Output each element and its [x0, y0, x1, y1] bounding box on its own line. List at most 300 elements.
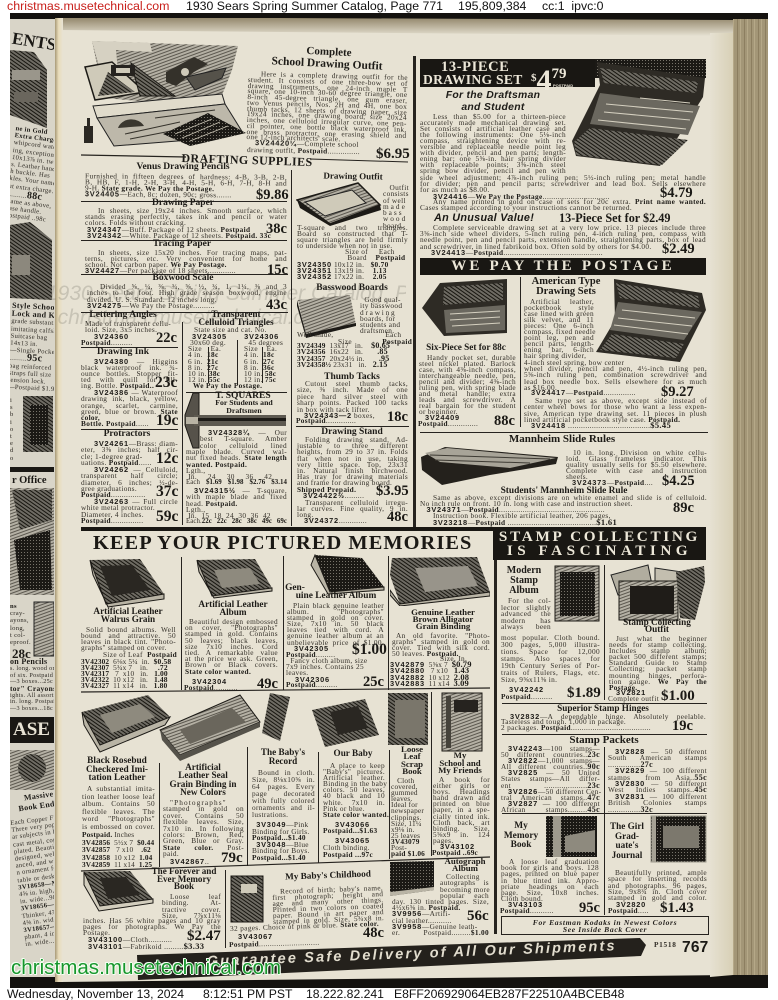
page code: P1518: [654, 940, 677, 949]
text block: 13-piece budget set: Complete serviceable drawing set at a very low price. 13 pieces include three: [433, 223, 706, 232]
text block: outfit description: to underside when not in use.: [297, 241, 392, 250]
order lines: paper: [87, 225, 271, 240]
text block: pencils: [10, 657, 54, 712]
order line: 3V23218: 3V23218—Postpaid .........................................$1.61: [433, 517, 617, 527]
text block: drawing ink: ing. Bottle. Postpaid..: [81, 381, 154, 390]
divider rule between album rows: [80, 685, 492, 695]
order line: Postpaid............................: [229, 938, 320, 949]
table rows: walrus: [81, 659, 171, 689]
panel: the girl graduate's journal: [607, 815, 708, 916]
heading: Loose Leaf Scrap Book: [401, 746, 423, 775]
text block: triangles note: State size and cat. No.: [194, 325, 267, 334]
text block: brass protractor: eter, 3⅜ inches; half cir-: [81, 445, 178, 454]
text block: forever narrow: Size, 7⅞x11⅛: [162, 911, 221, 920]
text block: packets left: 3V42243—100 stamps—: [508, 744, 600, 753]
text block: autograph wide: day. 130 tinted pages. Size,: [392, 897, 489, 906]
text block: school bag copy: bag reinforced: [10, 362, 52, 371]
heading: for students and draftsmen: [215, 399, 273, 414]
heading: Autograph Album: Album: [452, 863, 478, 873]
text block: lettering angles: loid. Size, 3x5 inches.: [85, 325, 157, 334]
text block: artificial album: on cover, "Photographs": [185, 623, 278, 632]
text block: genuine album: Plain black genuine leather: [293, 601, 384, 610]
text block: outfit narrow column: bass: [383, 208, 404, 217]
text block: our baby: A place to keep: [330, 761, 385, 770]
text block: celluloid protractor: [81, 465, 178, 499]
heading: Transparent Celluloid Triangles: Celluloid Triangles: [198, 318, 274, 328]
heading: My School and My Friends: My: [454, 750, 466, 760]
text block: rosebud: album. Contains 50: [82, 799, 155, 808]
text block: american type narrow: [524, 299, 594, 359]
text block: walrus: bound and attractive. 50: [81, 631, 176, 640]
text block: american type narrow: case lined with green: [524, 309, 594, 318]
banner: guarantee safe delivery: [130, 934, 650, 982]
table: outfit sizes: [343, 249, 405, 261]
heading: My School and My Friends: My Friends: [438, 765, 482, 775]
text block: packets left: 3V2822—1,000 stamps—: [508, 756, 600, 765]
table: 30x60 triangles: 10 in. 38c: [188, 369, 220, 378]
text block: packets left: [501, 746, 600, 813]
order lines: baby's record: 3V3049—Pink: [256, 820, 308, 829]
text block: scrap book: newspaper: [391, 806, 424, 815]
text block: journal: Beautifully printed, ample: [615, 868, 707, 877]
heading: Artificial Leather Album: Album: [219, 607, 247, 617]
text block: basswood: drawing: [360, 308, 397, 317]
text block: drawing paper: In sheets, size 19x24 inches. Smooth surface, which: [98, 206, 287, 215]
text block: crayons: ayons,: [10, 617, 29, 624]
heading: Modern Stamp Album: Modern: [507, 565, 541, 576]
text block: seal grain: cover. Contains 50: [163, 811, 244, 820]
text block: brass protractor: [81, 439, 178, 467]
text block: forever wide: [83, 918, 221, 936]
picture: alligator album: [390, 556, 490, 606]
text block: 3V24328: color celluloid lined: [200, 441, 287, 450]
text block: american type wide: [524, 360, 707, 391]
heading: Students' Mannheim Slide Rule: Students' Mannheim Slide Rule: [501, 486, 627, 496]
order number: 3V42305: 3V42305: [294, 644, 329, 653]
picture: office supplies: [10, 488, 54, 595]
text block: packets right: stamps from Asia..55c: [608, 773, 707, 782]
order line: Postpaid ..69c: [432, 848, 478, 857]
text block: stamp album wide: 300 pages, 5,000 illustra-: [501, 640, 600, 649]
text block: baby's record: with fully colored: [252, 796, 315, 805]
text block: baby's record: lustrations.: [252, 810, 288, 819]
picture: open drawing set case: [570, 60, 707, 168]
text block: tracing paper: school. Not carbon paper. We Pay Postage.: [85, 260, 227, 269]
panel: our baby: [320, 748, 387, 860]
table rows: alligator: 3V42879 5⅝x 7 $0.79: [390, 659, 472, 669]
text block: stamp album wide: 19th Century Series of Por-: [501, 661, 600, 670]
text block: thumb tacks: in box with tack lifter.: [297, 405, 370, 414]
text block: set description: with replaceable points; 3⅝-inch steel: [420, 160, 566, 169]
text block: metal protractor: Diameter, 4 inches.: [81, 510, 144, 519]
text block: tracing paper: In sheets, size 15x20 inches. For tracing maps, pat-: [98, 248, 287, 257]
banner: guarantee safe delivery: Guarantee Safe Delivery of All Our Shipments: [207, 938, 615, 970]
text block: stamp outfit: Just what the beginner: [616, 634, 707, 643]
banner: stamp collecting is fascinating: [493, 528, 706, 560]
picture: six-piece case: [420, 277, 510, 337]
text block: baby's record: 64 pages. Every: [252, 782, 315, 791]
text block: six-piece description: ruling pen, with spring blade: [419, 383, 516, 392]
text block: set description: Set consists of artificial leather case and: [420, 124, 566, 133]
heading: Autograph Album: Autograph: [444, 856, 486, 866]
text block: six-piece description: case, with 4⅜-inch compass,: [419, 365, 516, 374]
order line: 3V43101: 3V43101—Fabrikoid .........$3.33: [88, 941, 204, 951]
text block: rosebud: flexible leaves. The: [82, 807, 155, 816]
order number: 3V2821: 3V2821: [616, 688, 646, 697]
text block: american type narrow: compass, fixed needle: [524, 327, 596, 336]
text block: forever narrow: tractive cover.: [162, 905, 221, 914]
text block: drawing ink: 3V24380 — Higgins: [94, 357, 178, 366]
text block: our baby: white. 7x10 in.: [323, 798, 385, 807]
order number: 3V43065: 3V43065: [335, 836, 370, 845]
text block: tracing paper: 3V24427—Per package of 18 sheets.............: [85, 266, 236, 275]
text block: forever narrow: [162, 894, 221, 919]
order line: tacks postpaid: Postpaid..............: [296, 416, 356, 425]
text block: irregular curves: [297, 500, 408, 519]
panel: my school and my friends: [432, 752, 490, 857]
text block: irregular curves: long.: [297, 510, 314, 519]
heading: Drawing Ink: Drawing Ink: [97, 347, 149, 357]
order number: 3V2820: 3V2820: [616, 900, 646, 909]
text block: packets left: 3V2825 — 50 United: [508, 768, 600, 777]
heading: The Girl Graduate's Journal: uate's: [616, 840, 638, 850]
heading: Artificial Leather Seal Grain Binding: New Colors: [180, 787, 226, 797]
text block: walrus: graphs" stamped on cover.: [81, 643, 167, 652]
text block: six-piece description: [419, 355, 516, 415]
text block: 3V24315: In. 15 18 24 30 36 42: [188, 511, 271, 520]
text block: packets right: 3V2831 — 100 different: [615, 792, 707, 801]
text block: 3V24315: Lgth.,: [186, 505, 205, 514]
text block: drawing stand: in. Natural finish birchwood.: [297, 466, 408, 475]
text block: my friends: [433, 777, 490, 844]
panel: my baby's childhood: [228, 866, 386, 950]
text block: autograph wide: 3V9956—Artifi-: [392, 909, 451, 918]
text block: stamp outfit: Postage.: [609, 683, 637, 692]
text block: lettering angles: Made of transparent cellu-: [85, 319, 171, 328]
text block: autograph narrow: becoming more: [440, 885, 490, 894]
text block: thumb tacks: piece hard silver steel with: [297, 392, 408, 401]
table rows: basswood: 3V24349 13x17 in. $0.65: [297, 341, 390, 350]
heading: Tracing Paper: Tracing Paper: [153, 239, 211, 249]
table: outfit sizes: Size of Each: [345, 247, 395, 256]
picture: stamp album: [554, 565, 601, 624]
text block: set description: Less than $5.00 for a thirteen-piece: [433, 112, 566, 121]
text block: my friends: paper, in a spe-: [433, 805, 490, 814]
text block: baby's record: Bound in cloth.: [258, 768, 315, 777]
text block: brass protractor: 3V24261—Brass: diam-: [94, 439, 178, 448]
panel: drawing outfit small: [295, 170, 410, 282]
price: 19c: 19c: [156, 412, 178, 429]
text block: american type narrow: silk velvet, and 11: [524, 315, 594, 324]
text block: our baby: Pink or blue.: [323, 804, 365, 813]
heading: Artificial Leather Walrus Grain: Walrus Grain: [101, 614, 155, 624]
text block: metal protractor: 3V24263 — Full circle: [94, 497, 178, 506]
table rows: outfit order numbers: 3V24350 10x12 in. $0.70: [297, 260, 389, 269]
banner text: postpaid: POSTPAID: [553, 83, 573, 88]
text block: pencils: on Pencils: [10, 657, 47, 666]
text: tasteless: [501, 719, 651, 731]
text block: basswood: Good qual-: [364, 295, 401, 304]
banner price: $4.79: $479: [531, 64, 566, 97]
text block: thumb tacks: [297, 381, 408, 413]
panel: american type drawing sets: [523, 277, 709, 430]
text block: basswood: students and: [360, 320, 400, 329]
text block: baby's childhood: [272, 885, 384, 926]
panel: black rosebud album: [80, 757, 158, 868]
text block: alligator: graphs" stamped in gold on: [392, 637, 490, 646]
text block: american type narrow: pocketbook style: [524, 303, 594, 312]
panel: venus pencils, drawing and tracing paper, boxwood scale: [81, 162, 289, 313]
text block: genuine album: unbelievable price of $1.00.: [287, 638, 384, 647]
text block: set description: the following instruments: One 5⅛-inch: [420, 130, 566, 139]
text block: six-piece description: interchangeable needle, pen,: [419, 371, 516, 380]
price: 38c: 38c: [266, 221, 287, 237]
text block: our baby: State color wanted.: [323, 810, 389, 819]
table: outfit sizes: Board Postpaid: [347, 253, 405, 262]
text block: packets right: 3V2830 — 50 different: [615, 779, 707, 788]
text block: journal: and photographs. 96 pages,: [608, 881, 707, 890]
banner: stamp collecting is fascinating: IS FASCINATING: [507, 542, 692, 559]
text block: gold name: Cases stamped according to your instructions cannot be returned.: [420, 203, 632, 212]
text block: basswood: [360, 297, 402, 335]
heading: Genuine Leather Brown Alligator Grain Binding: Brown Alligator: [413, 614, 473, 624]
text block: t square details: maple blade. Curved wal-: [186, 447, 287, 456]
text block: outfit description: two Venus pencils, Nos. 2H and 4H, one box: [247, 98, 407, 111]
order line: Complete outfit: [608, 694, 659, 703]
text block: drawing ink: ounce bottles. Stopper fit-: [81, 369, 178, 378]
price: 28c: 28c: [12, 646, 31, 661]
text block: baby's childhood: age and many other things.: [272, 895, 384, 908]
text block: american type wide: as $16.00.: [524, 383, 557, 392]
text block: slide rule: quality usually sells for $5.50 elsewhere.: [566, 460, 707, 469]
text block: metal protractor: Postpaid...............: [81, 516, 143, 525]
text block: autograph wide: er. Postpaid.........$1.00: [392, 928, 489, 937]
table rows: basswood: 3V24357 20x24½ in. .95: [297, 354, 389, 363]
text block: massive book ends: [18, 789, 54, 813]
order line: 3V24420: 3V24420¼—Complete school: [255, 138, 359, 149]
text block: memory book: pages, printed on blue paper: [501, 869, 599, 878]
price: 89c: 89c: [673, 500, 694, 516]
text block: set description: with divider, pencil and pen parts; length-: [420, 148, 566, 157]
table rows: rosebud: [82, 831, 154, 869]
text block: fancy cloth album: [286, 652, 367, 676]
icon: portfolio case: [23, 396, 53, 452]
text block: stamp outfit: Collecting; packet stamp: [609, 664, 707, 673]
heading: Stamp Collecting Outfit: Outfit: [645, 624, 669, 634]
order line: 3V24422: 3V24422½.........: [303, 491, 364, 500]
text block: boxwood scale: [87, 282, 287, 310]
text block: my friends: A book for: [439, 775, 490, 784]
price: $6.95: $6.95: [376, 146, 410, 162]
text block: pencils: —3 boxes...25c: [10, 678, 53, 685]
text block: six-piece description: pencil and divider; 4⅜-inch: [419, 377, 516, 386]
heading: The Girl Graduate's Journal: Journal: [612, 850, 642, 860]
text block: stamp outfit: Includes stamp album;: [609, 646, 707, 655]
order number: 3V43067: 3V43067: [238, 932, 273, 941]
price: 48c: 48c: [363, 925, 384, 941]
text block: students rule: No inch rule on front. 10 in. long with case and instruction sheet.: [420, 499, 633, 508]
text block: autograph narrow: popular each: [440, 891, 489, 900]
text block: genuine album: Size, 7x10 in. 50 black: [287, 619, 384, 628]
panel: drawing stand: [295, 427, 410, 525]
heading: Complete: Complete: [306, 45, 352, 59]
text block: autograph narrow: Collecting: [446, 872, 480, 881]
panel: complete school drawing outfit: [84, 41, 410, 169]
text block: 3V24328: 3V24328¼ — Our: [208, 428, 287, 437]
text block: bag copy: h buckle. Has: [10, 168, 50, 180]
table: 30x60 triangles: 30x60 deg.: [190, 338, 226, 347]
text block: artificial album: [185, 619, 278, 675]
text block: outfit description: one brass protractor, one erasing shield and: [246, 126, 407, 139]
panel: my memory book: [499, 815, 602, 916]
order line: Postpaid...$1.63: [323, 826, 378, 835]
text block: packets left: States stamps—All differ-: [501, 774, 600, 783]
heading: The Girl Graduate's Journal: The Girl: [610, 821, 644, 831]
text block: outfit description: square, one 10-inch 30-60 degree triangle, one: [247, 86, 408, 99]
text block: packets right: British Colonies stamps: [608, 798, 707, 807]
text block: irregular curves: lar curves. Fine quality, 9 in.: [297, 504, 408, 513]
panel: loose leaf scrap book: [390, 746, 430, 858]
heading: American Type Drawing Sets: Drawing Sets: [536, 286, 596, 297]
heading: Office: r Office: [12, 475, 46, 486]
text block: stamp outfit: packet 500 different stamps;: [609, 652, 707, 661]
table: 45 degree triangles: 12 in. 75c: [244, 375, 276, 384]
text block: my friends: printed on blue: [433, 799, 490, 808]
text: well made: Well made, Each: [297, 330, 401, 339]
text block: artificial album: State color wanted.: [185, 667, 251, 676]
text: size head: Size, In.: [440, 654, 467, 663]
text block: pencils: 9-H. State grade. We Pay the Postage.: [85, 183, 214, 193]
table: 45 degree triangles: 6 in. 27c: [244, 357, 275, 366]
heading: Modern Stamp Album: [507, 566, 541, 596]
divider rule above bottom row: [80, 855, 492, 873]
picture: drawing outfit board: [296, 182, 382, 226]
text block: baby's childhood: first photograph; height and: [272, 889, 383, 902]
text block: packets left: tral American stamps..47c: [501, 793, 600, 802]
text block: autograph wide: cial leather...........: [392, 916, 452, 925]
picture: walrus album: [88, 558, 166, 608]
text block: packets right: South American stamps: [608, 753, 707, 762]
text block: tracing paper: terns, pictures, etc. Very convenient for home and: [85, 254, 287, 263]
text block: outfit narrow column: [383, 185, 409, 229]
text block: baby's childhood: Record of birth; baby's name,: [280, 883, 383, 896]
text block: six-piece description: steel nickel plated. Barlock: [419, 359, 516, 368]
heading: The Girl Graduate's Journal: Grad-: [615, 831, 639, 841]
heading: Stamp Packets: Stamp Packets: [569, 734, 639, 746]
text block: school bag copy: 14x13 in.: [10, 340, 38, 348]
text block: celluloid protractor: 3V24262 — Celluloid,: [94, 465, 178, 474]
text block: our baby: colors. 50 leaves,: [323, 785, 385, 794]
text block: fancy cloth album: 7x9 inches. Contains 25: [286, 662, 364, 671]
heading: 13-Piece Set for $2.49: 13-Piece Set for $2.49: [559, 211, 670, 225]
text block: school bag copy: .........95c: [10, 353, 43, 365]
heading: Drawing Outfit: Drawing Outfit: [323, 170, 383, 182]
panel: left facing page: [10, 29, 54, 948]
text block: drawing paper: colors. Folds without cracking.: [85, 218, 186, 227]
text block: boxwood scale: Divided ⅝, ¼, ⅜, ¾, ⅝, ½, ¾, 1, 1¼, ⅜ and 3: [100, 282, 287, 291]
picture: autograph album: [388, 860, 438, 898]
price: 43c: 43c: [266, 297, 287, 313]
text block: students rule: Same as above, except divisions are on white enamel and slide is of celluloid.: [433, 493, 707, 502]
order lines: baby's record: Postpaid...$1.40: [252, 833, 306, 842]
order number: 3V43066: 3V43066: [335, 820, 370, 829]
table: 45 degree triangles: Size Ea.: [244, 344, 277, 353]
order line: 3V24418: 3V24418 ......................................$5.45: [531, 420, 671, 430]
price: 18c: 18c: [387, 409, 408, 425]
text block: stamp outfit: needs for stamp collecting.: [609, 640, 707, 649]
heading: My Memory Book: Book: [511, 840, 531, 850]
text block: scrap book: 25 leaves: [391, 831, 420, 840]
text block: t square details: [186, 449, 287, 487]
text block: outfit description: 8-inch 45-degree triangle, one gum eraser,: [247, 92, 407, 105]
text block: fancy cloth album: Fancy cloth album, size: [290, 656, 367, 665]
text block: celluloid protractor: diameter, 6 inches; ½-de-: [81, 478, 178, 487]
heading: Our Baby: Our Baby: [334, 748, 372, 758]
heading: Artificial Leather Album: [198, 600, 268, 616]
table: 45 degree triangles: [244, 340, 283, 383]
text block: genuine album: leaves tied with cord. A: [287, 625, 384, 634]
text block: metal protractor: [81, 497, 178, 525]
text block: portfolio: i: [10, 397, 12, 404]
order lines: baby's record: [252, 822, 310, 862]
heading: for students and draftsmen: Draftsmen: [226, 406, 262, 414]
text block: stamp outfit: [609, 636, 707, 691]
heading: Drawing Paper: Drawing Paper: [152, 198, 214, 208]
text block: hinges: 3V2832—A dependable hinge. Absolutely peelable.: [510, 712, 706, 721]
text block: second set: sive, American type drawing set. 11 pieces in plush: [524, 409, 707, 418]
text block: memory book: A loose leaf graduation: [509, 857, 599, 866]
heading: Transparent Celluloid Triangles: Transparent: [211, 310, 261, 320]
heading: My Memory Book: Memory: [504, 830, 538, 840]
heading: Genuine Leather Brown Alligator Grain Binding: Genuine Leather: [411, 607, 475, 617]
text block: forever narrow: Loose leaf: [170, 892, 221, 901]
heading: Artificial Leather Walrus Grain: [93, 607, 163, 623]
text block: packets left: 3V2826—50 different Cen-: [508, 787, 602, 796]
price: $9.27: $9.27: [661, 384, 694, 400]
text block: crayons: t col-: [10, 632, 26, 639]
text block: scrap book: leaves.: [391, 794, 412, 803]
text block: slide rule: Complete with case and instruction: [566, 466, 707, 475]
table: 45 degree triangles: 45 degrees: [248, 338, 283, 347]
text block: fancy cloth album: Postpaid.........: [286, 650, 335, 659]
panel: the baby's record: [250, 748, 317, 864]
heading: Drawing Stand: Drawing Stand: [321, 427, 383, 437]
text block: drawing stand: Shipped Prepaid.: [297, 485, 356, 494]
text block: american type narrow: pieces: One 6-inch: [524, 321, 594, 330]
text block: artificial album: tied. A remarkable value: [185, 648, 278, 657]
panel: celluloid triangles and T squares: [184, 310, 287, 525]
text block: scrap book: Ideal for: [391, 800, 418, 809]
text block: outfit description: cil pointer, one bottle black waterproof ink,: [247, 121, 407, 134]
text block: drawing stand: heights, from 29 to 37 in. Folds: [297, 447, 408, 456]
text block: six-piece description: Handy pocket set, durable: [427, 353, 516, 362]
panel: six-piece set: [418, 277, 518, 429]
text block: baby's record: page decorated: [252, 789, 315, 798]
text block: outfit narrow column: consists: [383, 189, 409, 198]
picture: embossed album: [195, 558, 273, 599]
panel: superior stamp hinges: [500, 704, 708, 734]
text block: celluloid protractor: gree graduations.: [81, 484, 137, 493]
heading: Mannheim Slide Rules: Mannheim Slide Rules: [509, 433, 615, 445]
panel: seal grain album: [161, 763, 246, 867]
text block: drawing paper: [85, 206, 287, 227]
text block: scrap book: clippings.: [391, 813, 422, 822]
text block: portfolio: e: [10, 440, 13, 447]
price: $4.25: $4.25: [662, 473, 695, 489]
page number: 767: 767: [682, 939, 708, 956]
heading: Artificial Leather Seal Grain Binding: Artificial: [185, 762, 221, 772]
text block: stamp album narrow: lector slightly: [501, 603, 551, 612]
